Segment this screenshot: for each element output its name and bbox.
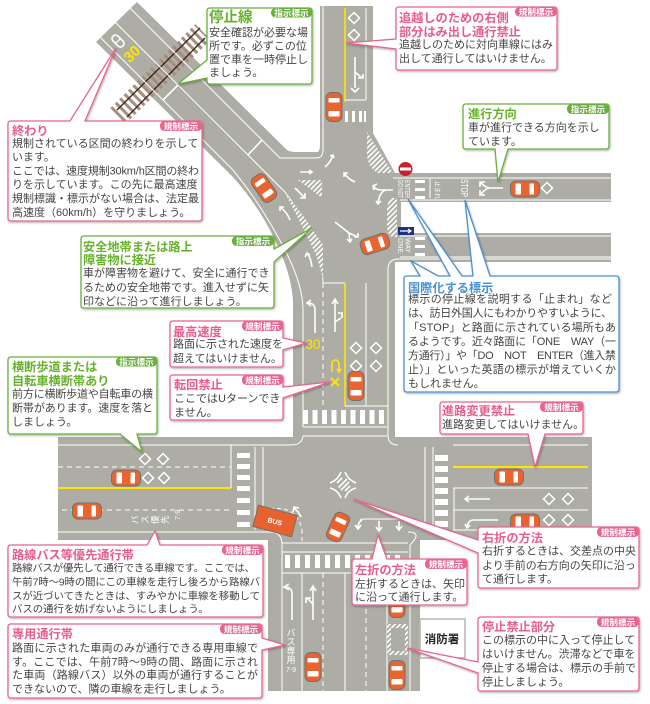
body text: より手前の右方向の矢印に沿っ [482, 558, 636, 572]
body text: 右折するときは、交差点の中央 [482, 544, 636, 558]
callout: 右折の方法 [353, 499, 639, 588]
callout: 安全地帯または路上障害物に接近 [81, 228, 312, 308]
body text [355, 576, 465, 604]
tag: 規制標示: 規制標示 [245, 320, 280, 332]
east road markings: STOP [458, 179, 469, 197]
body text: 標示の停止線を説明する「止まれ」など [408, 292, 612, 306]
body text [209, 25, 308, 79]
no-entry sign [398, 162, 412, 176]
road marking: no U-turn [331, 360, 341, 386]
cars [72, 92, 540, 690]
body text: ません。 [174, 406, 218, 419]
lower left road markings: バス優先 [130, 514, 170, 524]
heading: 終わり [12, 123, 49, 138]
body text: 印などに沿って進行しましょう。 [83, 295, 247, 308]
body text [12, 640, 258, 696]
heading [83, 239, 193, 267]
east road markings: 止まれ [433, 181, 441, 199]
road marking: end of speed limit [111, 34, 125, 48]
east road markings: ONE [396, 238, 403, 253]
junction hatched safety zones [285, 132, 397, 278]
body text: もしれません。 [408, 377, 485, 390]
body text: た車両（路線バス）以外の車両が通行することが [12, 668, 258, 682]
body text: ここではUターンでき [174, 392, 280, 405]
callout: 停止線 [178, 7, 312, 84]
heading: 障害物に接近 [83, 252, 156, 267]
body text: 車が障害物を避けて、安全に通行でき [83, 266, 269, 280]
callout: 路線バス等優先通行帯 [8, 531, 263, 617]
body text: 超えてはいけません。 [173, 351, 282, 365]
body text: て通行します。 [482, 572, 558, 586]
fire station building [420, 619, 465, 658]
bottom junction markings [270, 507, 416, 691]
tag: 規制標示: 規制標示 [429, 558, 464, 570]
heading: 路線バス等優先通行帯 [12, 547, 134, 562]
heading: 安全地帯または路上 [83, 239, 193, 254]
body text: 路面に示された速度を [173, 338, 283, 350]
body text: るようです。近々路面に「ONE WAY（一 [408, 335, 616, 348]
body text: バスの通行を妨げないようにしましょう。 [12, 602, 209, 616]
tag: 規制標示: 規制標示 [225, 544, 260, 556]
body text: 出して通行してはいけません。 [399, 52, 552, 65]
body text: 進路変更してはいけません。 [442, 418, 584, 431]
top vertical road markings [345, 8, 366, 122]
heading [12, 359, 110, 388]
callout: 国際化する標示 [404, 199, 619, 392]
heading: 停止禁止部分 [482, 619, 556, 634]
body text: 午前7時〜9時の間にこの車線を走行し後ろから路線バ [12, 576, 260, 588]
body text: 断帯があります。速度を落と [12, 400, 153, 414]
diagonal road lane lines [100, 6, 323, 427]
callout: 転回禁止 [170, 374, 330, 420]
tag: 規制標示: 規制標示 [601, 616, 636, 628]
body text: 車が進行できる方向を示し [468, 120, 600, 134]
bottom junction markings: 専 [286, 645, 296, 656]
central lane markings [303, 259, 611, 445]
tag: 規制標示: 規制標示 [601, 526, 636, 538]
bus [253, 505, 297, 537]
east road markings: DO NOT [396, 180, 403, 198]
east road markings: ENTER [403, 180, 410, 198]
junction direction arrows [280, 155, 393, 267]
heading: 国際化する標示 [408, 280, 493, 295]
body text [12, 386, 153, 428]
body text: 追越しのために対向車線にはみ [399, 37, 553, 51]
body text: スが近づいてきたときは、すみやかに車線を移動して [12, 590, 260, 602]
bottom junction markings: 用 [286, 655, 296, 665]
intersection right-turn guide marking [330, 472, 356, 498]
body text [408, 292, 616, 390]
heading: 転回禁止 [174, 377, 223, 392]
road marking: speed 30 on diagonal road: 30 [120, 42, 144, 66]
body text [12, 562, 260, 616]
tag: 規制標示: 規制標示 [245, 374, 280, 386]
tag: 指示標示: 指示標示 [119, 356, 154, 367]
tag: 指示標示: 指示標示 [236, 236, 271, 246]
callout: 最高速度 [170, 320, 306, 367]
body text: この標示の中に入って停止して [482, 632, 635, 646]
body text [482, 544, 636, 586]
heading: 進路変更禁止 [442, 403, 515, 418]
fire station building: 消防署 [425, 632, 459, 646]
body text [468, 120, 600, 148]
road marking: speed 30: 30 [306, 336, 321, 352]
body text: 置で車を一時停止し [209, 52, 308, 66]
body text [83, 266, 269, 308]
body text: 「STOP」と路面に示されている場所もあ [408, 320, 616, 334]
body text: 安全確認が必要な場 [209, 25, 308, 39]
body text: 停止しましょう。 [482, 676, 569, 688]
callout: 進行方向 [463, 104, 609, 182]
body text: できないので、隣の車線を走行しましょう。 [12, 682, 231, 696]
heading: 自転車横断帯あり [12, 373, 110, 388]
body text: す。ここでは、午前7時〜9時の間、路面に示され [12, 654, 258, 668]
heading: 追越しのための右側 [399, 10, 509, 25]
heading [399, 10, 521, 39]
callout: 進路変更禁止 [440, 402, 584, 467]
bottom junction markings: バ [286, 628, 296, 638]
callout: 停止禁止部分 [407, 616, 639, 691]
bottom junction markings: ス [286, 637, 296, 647]
callout: 左折の方法 [352, 535, 467, 605]
lower left road markings: 7-9 [175, 510, 182, 520]
body text: 前方に横断歩道や自転車の横 [12, 386, 153, 400]
railway crossing [117, 28, 205, 117]
body text [399, 37, 553, 65]
tag: 指示標示: 指示標示 [571, 104, 606, 114]
east road markings [393, 178, 611, 257]
one-way sign [398, 227, 414, 235]
heading: 横断歩道または [12, 359, 97, 374]
heading: 右折の方法 [482, 530, 543, 545]
body text: るための安全地帯です。進入せずに矢 [83, 280, 269, 294]
lower left road markings [58, 436, 303, 545]
body text: は、訪日外国人にもわかりやすいように、 [408, 306, 612, 320]
body text: 左折するときは、矢印 [355, 576, 465, 590]
body text: に沿って通行します。 [355, 590, 463, 604]
body text: しましょう。 [12, 416, 77, 428]
body text [12, 136, 199, 219]
body text [174, 392, 280, 419]
body text: 規制されている区間の終わりを示して [12, 136, 198, 150]
tag: 規制標示: 規制標示 [544, 402, 579, 412]
callout: 終わり [8, 48, 202, 221]
body text: はいけません。渋滞などで車を [482, 646, 635, 660]
body text: ています。 [468, 135, 522, 148]
body text: 路線バスが優先して通行できる車線です。ここでは、 [12, 562, 255, 574]
body text: 止）」といった英語の標示が増えていくか [408, 362, 616, 376]
body text: 停止する場合は、標示の手前で [482, 660, 636, 674]
body text: ここでは、速度規制30km/h区間の終わ [12, 164, 199, 178]
heading: 部分はみ出し通行禁止 [399, 24, 521, 39]
heading: 左折の方法 [355, 562, 416, 577]
body text: います。 [12, 150, 55, 164]
body text: ましょう。 [209, 66, 263, 79]
body text: 所です。必ずこの位 [209, 38, 307, 52]
tag: 指示標示: 指示標示 [274, 7, 309, 18]
body text: 方通行）」や「DO NOT ENTER（進入禁 [408, 348, 616, 362]
heading: 停止線 [209, 8, 253, 26]
body text [173, 338, 283, 365]
callout: 追越しのための右側部分はみ出し通行禁止 [346, 6, 557, 70]
body text: 路面に示された車両のみが通行できる専用車線で [12, 640, 258, 654]
tag: 規制標示: 規制標示 [519, 6, 554, 17]
tag: 規制標示: 規制標示 [224, 624, 259, 634]
tag: 規制標示: 規制標示 [164, 120, 199, 132]
heading: 進行方向 [468, 106, 517, 121]
heading: 最高速度 [173, 324, 222, 339]
body text: りを示しています。この先に最高速度 [12, 177, 198, 191]
bus: BUS [267, 517, 283, 528]
callout: 横断歩道または自転車横断帯あり [8, 356, 157, 452]
body text [482, 632, 636, 688]
callout: 専用通行帯 [8, 624, 285, 698]
bottom junction markings: 7-9 [286, 667, 296, 674]
body text: 高速度（60km/h）を守りましょう。 [12, 205, 190, 219]
lower right road markings [425, 445, 588, 530]
east road markings: WAY [404, 238, 410, 253]
body text: 規制標識・標示がない場合は、法定最 [12, 191, 199, 205]
heading: 専用通行帯 [12, 626, 73, 641]
